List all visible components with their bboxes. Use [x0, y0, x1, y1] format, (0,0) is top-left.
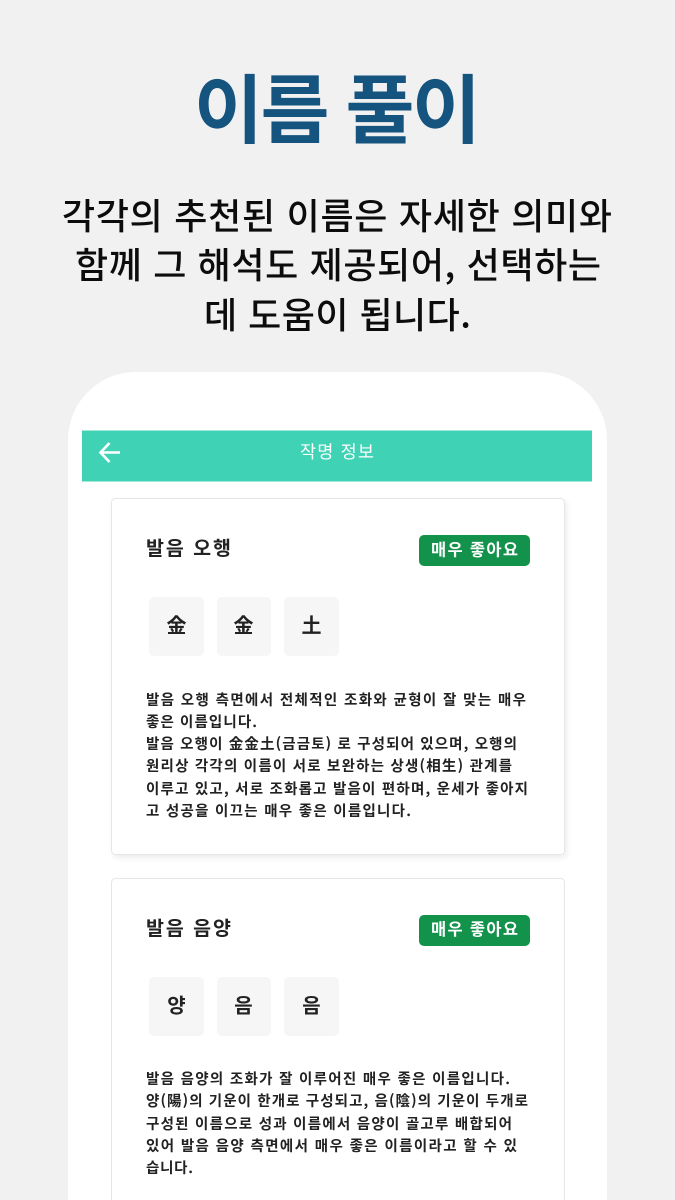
- card description: 이루고 있고, 서로 조화롭고 발음이 편하며, 운세가 좋아지: [146, 778, 528, 799]
- card description: 양(陽)의 기운이 한개로 구성되고, 음(陰)의 기운이 두개로: [146, 1090, 528, 1111]
- yin yang tiles: 음: [234, 990, 253, 1018]
- element tiles: 金: [166, 610, 186, 638]
- element tiles: 土: [302, 610, 322, 638]
- element tiles: 金: [234, 610, 254, 638]
- card description: 원리상 각각의 이름이 서로 보완하는 상생(相生) 관계를: [146, 755, 512, 776]
- app header bar: [82, 430, 592, 482]
- rating badge: 매우 좋아요: [431, 536, 518, 560]
- rating badge: 매우 좋아요: [431, 916, 518, 940]
- card heading: 발음 음양: [146, 912, 231, 941]
- panel: pronunciation yin yang card: [112, 878, 564, 1200]
- card description: 발음 음양의 조화가 잘 이루어진 매우 좋은 이름입니다.: [146, 1068, 510, 1089]
- card description: 구성된 이름으로 성과 이름에서 음양이 골고루 배합되어: [146, 1113, 512, 1134]
- card description: [146, 1068, 528, 1178]
- rating badge: [419, 915, 530, 946]
- yin yang tiles: 양: [167, 990, 186, 1018]
- icon: back arrow: [100, 443, 120, 462]
- header title: 작명 정보: [300, 439, 374, 464]
- card description: [146, 689, 528, 821]
- card description: 있어 발음 음양 측면에서 매우 좋은 이름이라고 할 수 있: [146, 1135, 517, 1156]
- panel: pronunciation five elements card: [112, 498, 564, 854]
- card description: 좋은 이름입니다.: [146, 711, 257, 732]
- panel: phone mockup: [68, 372, 607, 1200]
- card description: 고 성공을 이끄는 매우 좋은 이름입니다.: [146, 800, 411, 821]
- title: 이름 풀이: [194, 50, 481, 159]
- yin yang tiles: [149, 977, 339, 1036]
- subtitle text block: 데 도움이 됩니다.: [204, 287, 471, 339]
- subtitle text block: [62, 188, 612, 339]
- card heading: 발음 오행: [146, 532, 231, 561]
- card description: 발음 오행이 金金土(금금토) 로 구성되어 있으며, 오행의: [146, 733, 517, 754]
- yin yang tiles: 음: [302, 990, 321, 1018]
- rating badge: [419, 535, 530, 566]
- subtitle text block: 각각의 추천된 이름은 자세한 의미와: [62, 188, 612, 240]
- subtitle text block: 함께 그 해석도 제공되어, 선택하는: [75, 237, 601, 289]
- card description: 습니다.: [146, 1157, 193, 1178]
- element tiles: [149, 597, 339, 656]
- card description: 발음 오행 측면에서 전체적인 조화와 균형이 잘 맞는 매우: [146, 689, 526, 710]
